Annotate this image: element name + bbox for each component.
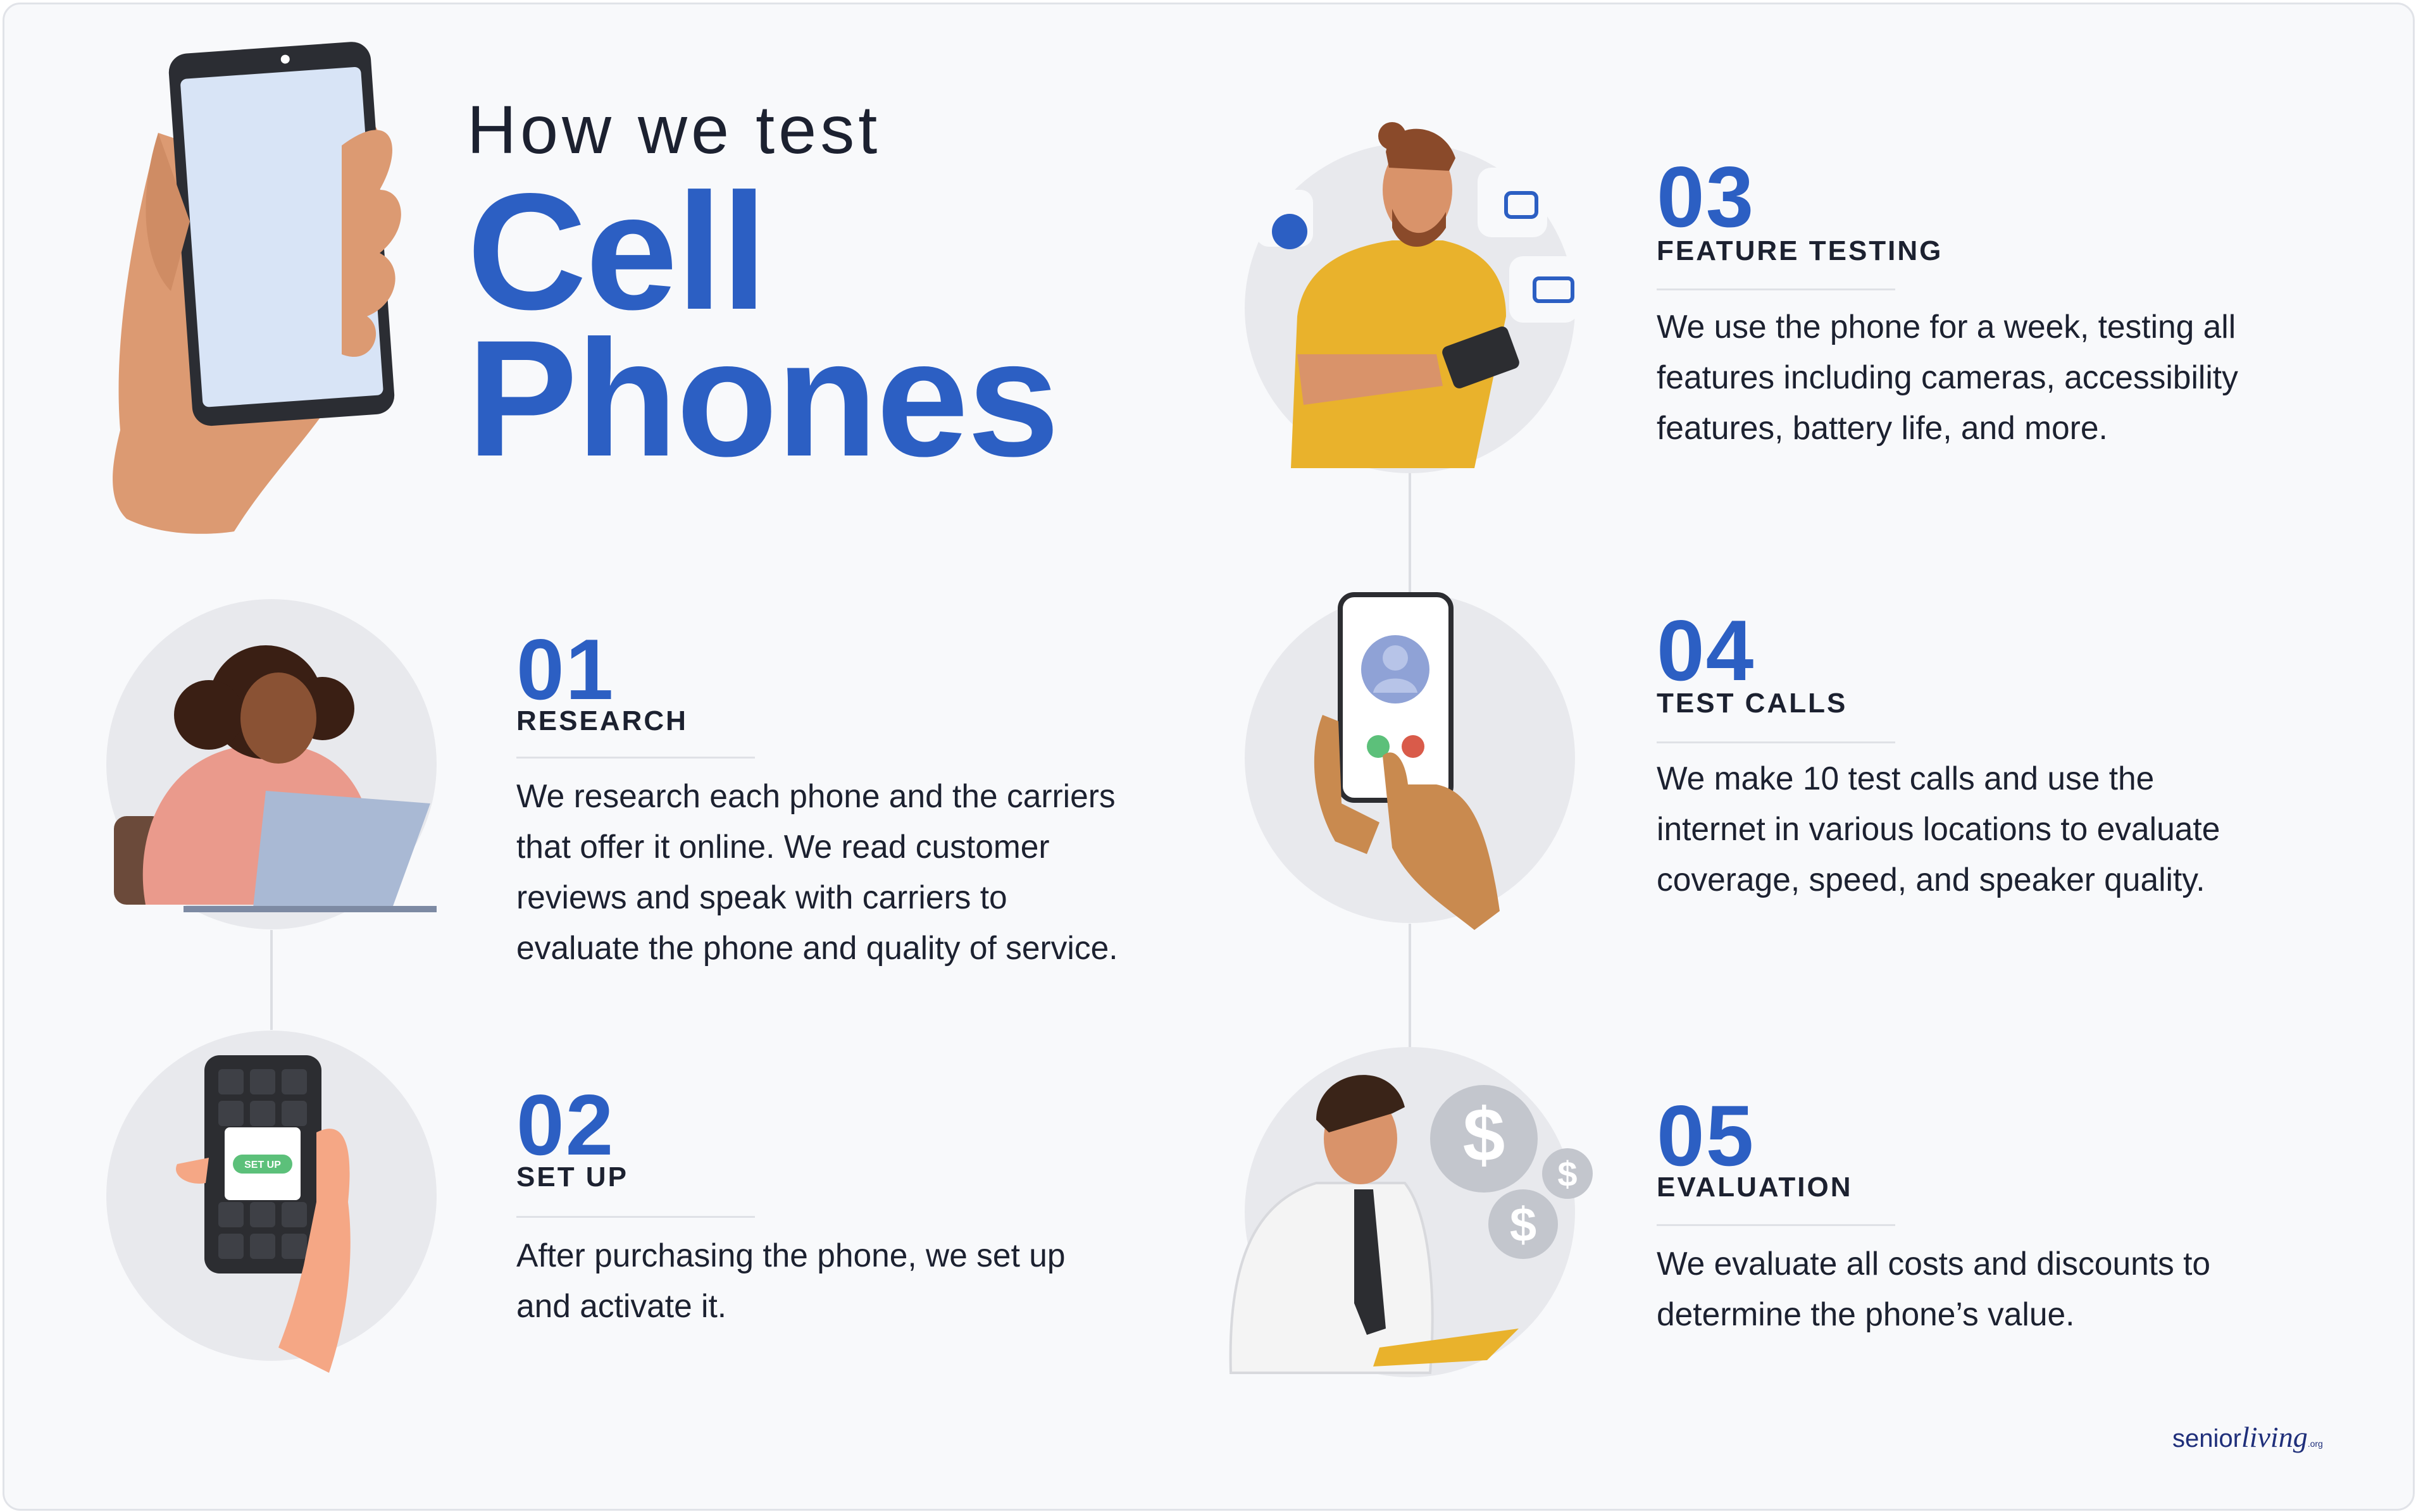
icon: step 2 set up illustration bbox=[106, 1031, 437, 1373]
step 02 text bbox=[516, 1077, 1065, 1324]
title: How we test bbox=[467, 91, 881, 168]
title bbox=[467, 91, 1058, 491]
step 01 text: evaluate the phone and quality of service. bbox=[516, 929, 1118, 966]
icon: hand holding phone bbox=[113, 40, 401, 534]
step 01 text: reviews and speak with carriers to bbox=[516, 879, 1007, 915]
icon: step 5 evaluation illustration: $ bbox=[1510, 1198, 1536, 1252]
step 05 text: EVALUATION bbox=[1657, 1172, 1852, 1203]
step 02 text: After purchasing the phone, we set up bbox=[516, 1237, 1065, 1273]
step 03 text: 03 bbox=[1657, 149, 1755, 245]
icon: step 5 evaluation illustration: $ bbox=[1463, 1093, 1505, 1177]
step 03 text: We use the phone for a week, testing all bbox=[1657, 308, 2236, 345]
step 03 text: features including cameras, accessibility bbox=[1657, 359, 2238, 395]
icon: step 5 evaluation illustration: $ bbox=[1557, 1154, 1578, 1194]
step 01 text: 01 bbox=[516, 621, 614, 717]
step 03 text bbox=[1657, 149, 2238, 446]
step 05 text bbox=[1657, 1088, 2210, 1332]
step 05 text: determine the phone’s value. bbox=[1657, 1296, 2074, 1332]
step 04 text: coverage, speed, and speaker quality. bbox=[1657, 861, 2205, 898]
step 05 text: We evaluate all costs and discounts to bbox=[1657, 1245, 2210, 1282]
title: Cell bbox=[467, 159, 766, 344]
step 02 text: and activate it. bbox=[516, 1287, 726, 1324]
step 05 text: 05 bbox=[1657, 1088, 1755, 1184]
icon: step 2 set up illustration: SET UP bbox=[244, 1160, 281, 1170]
logo: seniorliving.org bbox=[2172, 1421, 2323, 1453]
step 02 text: 02 bbox=[516, 1077, 614, 1173]
title: Phones bbox=[467, 306, 1058, 491]
step 04 text: 04 bbox=[1657, 602, 1755, 698]
step 04 text: We make 10 test calls and use the bbox=[1657, 760, 2154, 796]
icon: step 3 feature testing illustration bbox=[1245, 122, 1579, 473]
step 02 text: SET UP bbox=[516, 1162, 628, 1193]
icon: step 4 test calls illustration bbox=[1245, 593, 1575, 930]
step 04 text bbox=[1657, 602, 2220, 898]
step 01 text: RESEARCH bbox=[516, 705, 688, 736]
step 01 text: We research each phone and the carriers bbox=[516, 778, 1116, 814]
connector lines bbox=[271, 471, 1410, 1047]
step 04 text: TEST CALLS bbox=[1657, 688, 1847, 719]
step 03 text: features, battery life, and more. bbox=[1657, 409, 2108, 446]
step 03 text: FEATURE TESTING bbox=[1657, 235, 1943, 266]
icon: step 5 evaluation illustration bbox=[1231, 1047, 1593, 1377]
step 01 text bbox=[516, 621, 1118, 966]
icon: step 1 research illustration bbox=[106, 599, 437, 929]
step 04 text: internet in various locations to evaluate bbox=[1657, 810, 2220, 847]
step 01 text: that offer it online. We read customer bbox=[516, 828, 1050, 865]
